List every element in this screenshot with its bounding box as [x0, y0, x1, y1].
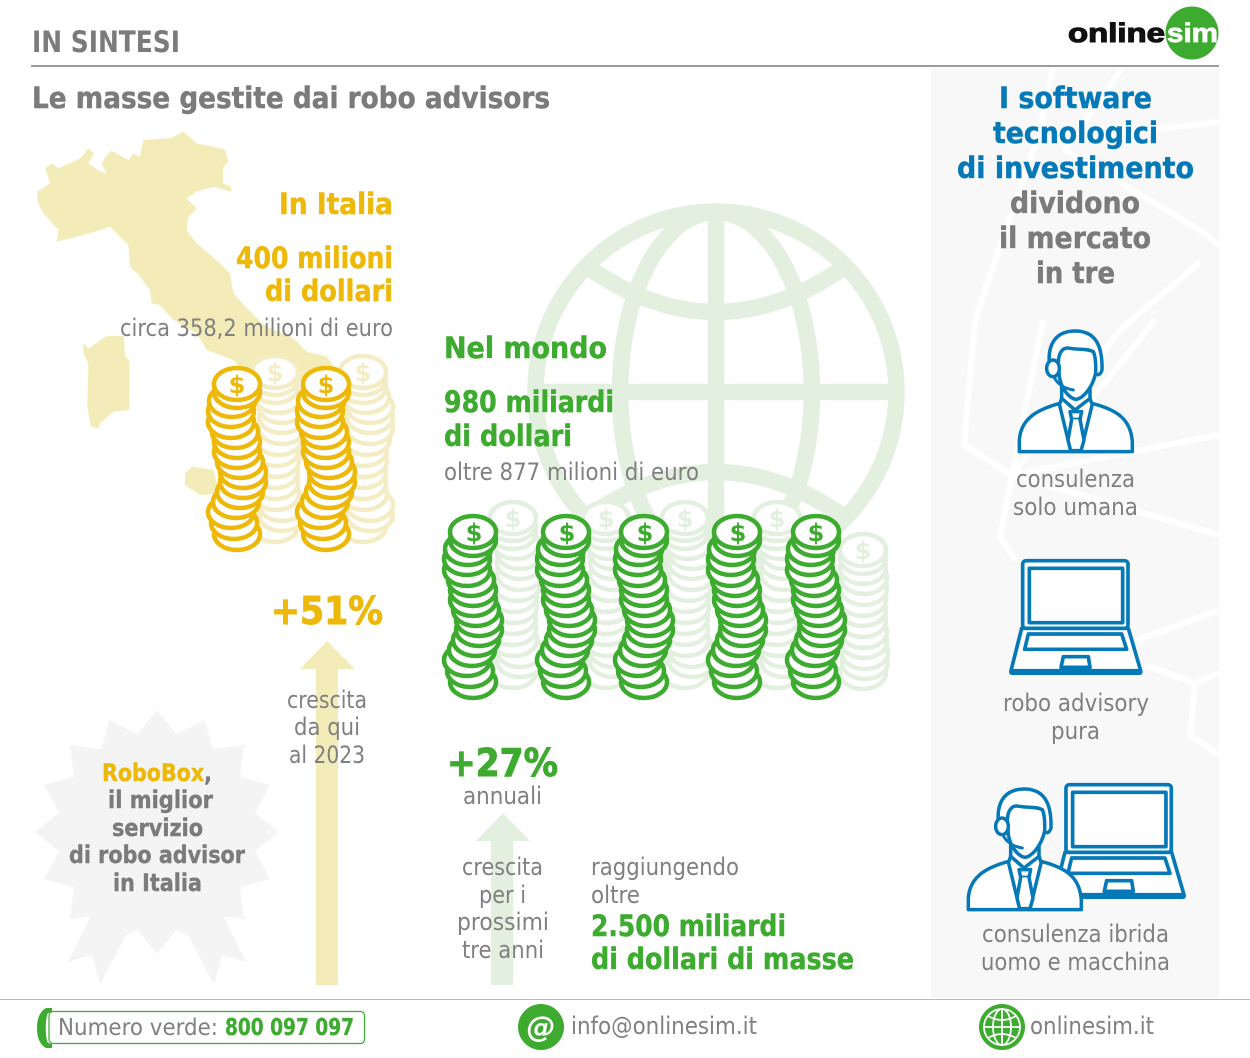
badge: RoboBox: servizio: [112, 814, 203, 842]
text: consulenza ibrida: consulenza ibrida: [982, 920, 1169, 948]
footer: email: @: [526, 1010, 556, 1044]
stat: +27%: [447, 741, 558, 810]
footer: phone number: [37, 1008, 364, 1048]
footer: website: [979, 1004, 1154, 1050]
chart: globe background: [536, 212, 896, 572]
arrow: Italy growth: [300, 641, 355, 985]
heading: software tecnologici: I software: [999, 81, 1152, 115]
text: raggiungendo: [591, 853, 854, 976]
chart: Italy coin stacks: $: [355, 359, 371, 387]
text: crescita Italia: [287, 686, 367, 769]
badge: RoboBox: il miglior: [108, 786, 213, 814]
badge: RoboBox: RoboBox,: [102, 759, 212, 787]
divider: [31, 65, 1219, 67]
text: In Italia: In Italia: [279, 187, 393, 221]
chart: world coin stacks: $: [855, 537, 871, 565]
text: crescita mondo: prossimi: [457, 908, 549, 936]
chart: world coin stacks: $: [598, 505, 614, 533]
text: crescita Italia: da qui: [294, 713, 360, 741]
chart: Italy coin stacks: $: [318, 371, 334, 399]
chart: world coin stacks: [444, 502, 888, 698]
text: crescita Italia: crescita: [287, 686, 367, 714]
badge: RoboBox: in Italia: [113, 869, 202, 897]
text: crescita mondo: crescita: [462, 853, 543, 881]
icon: hybrid advisor and laptop: [968, 785, 1184, 910]
heading: software tecnologici: tecnologici: [993, 116, 1158, 150]
chart: world coin stacks: $: [559, 519, 575, 547]
logo: onlinesim: online: [1068, 18, 1165, 48]
footer: website: onlinesim.it: [1030, 1012, 1154, 1040]
heading: software tecnologici: [957, 81, 1194, 290]
heading: masse gestite: Le masse gestite dai robo advisors: [32, 81, 550, 115]
text: raggiungendo: raggiungendo: [591, 853, 739, 881]
logo: onlinesim: sim: [1167, 18, 1218, 48]
chart: world coin stacks: $: [637, 519, 653, 547]
chart: world coin stacks: $: [677, 505, 693, 533]
text: Nel mondo: [444, 331, 699, 486]
footer: phone number: 800 097 097: [225, 1015, 354, 1041]
chart: world coin stacks: $: [808, 519, 824, 547]
text: Nel mondo: 980 miliardi: [444, 385, 614, 419]
stat: +27%: annuali: [463, 782, 542, 810]
text: Nel mondo: oltre 877 milioni di euro: [444, 458, 699, 486]
heading: software tecnologici: in tre: [1036, 256, 1115, 290]
text: raggiungendo: di dollari di masse: [591, 942, 854, 976]
text: consulenza ibrida: [981, 920, 1170, 976]
chart: world coin stacks: $: [466, 519, 482, 547]
text: robo advisory pura: pura: [1051, 717, 1100, 745]
text: crescita mondo: tre anni: [462, 936, 544, 964]
text: consulenza solo umana: consulenza: [1016, 465, 1135, 493]
text: In Italia: [120, 187, 393, 342]
text: consulenza solo umana: solo umana: [1013, 493, 1138, 521]
footer: phone number: Numero verde:: [58, 1015, 218, 1041]
text: Nel mondo: Nel mondo: [444, 331, 607, 365]
text: consulenza ibrida: uomo e macchina: [981, 948, 1170, 976]
footer divider: [0, 999, 1250, 1000]
badge: RoboBox: di robo advisor: [69, 841, 245, 869]
text: crescita mondo: [457, 853, 549, 964]
text: consulenza solo umana: [1013, 465, 1138, 521]
chart: Italy coin stacks: [208, 356, 393, 550]
icon: human advisor: [1019, 331, 1132, 452]
chart: Italy coin stacks: $: [267, 359, 283, 387]
text: robo advisory pura: robo advisory: [1003, 689, 1149, 717]
text: raggiungendo: 2.500 miliardi: [591, 909, 786, 943]
footer: email: [518, 1004, 757, 1050]
chart: world coin stacks: $: [730, 519, 746, 547]
chart: Italy coin stacks: $: [229, 371, 245, 399]
logo: onlinesim: [1068, 6, 1218, 60]
map: Italy: [37, 132, 377, 495]
heading: software tecnologici: di investimento: [957, 151, 1194, 185]
panel: right column background: [931, 68, 1219, 998]
heading: software tecnologici: il mercato: [999, 221, 1151, 255]
heading: software tecnologici: dividono: [1010, 186, 1140, 220]
text: In Italia: di dollari: [265, 274, 393, 308]
title: IN SINTESI: [32, 25, 180, 59]
badge: RoboBox: [35, 710, 279, 985]
text: raggiungendo: oltre: [591, 881, 640, 909]
arrow: world growth: [476, 813, 530, 985]
text: Nel mondo: di dollari: [444, 419, 572, 453]
stat: +51%: +51%: [271, 589, 383, 633]
footer: email: info@onlinesim.it: [571, 1012, 757, 1040]
text: crescita mondo: per i: [479, 881, 526, 909]
stat: +27%: +27%: [447, 741, 558, 785]
chart: world coin stacks: $: [769, 505, 785, 533]
text: robo advisory pura: [1003, 689, 1149, 745]
icon: laptop: [1011, 561, 1141, 672]
text: In Italia: 400 milioni: [236, 241, 393, 275]
text: crescita Italia: al 2023: [289, 741, 365, 769]
text: In Italia: circa 358,2 milioni di euro: [120, 314, 393, 342]
chart: world coin stacks: $: [505, 505, 521, 533]
